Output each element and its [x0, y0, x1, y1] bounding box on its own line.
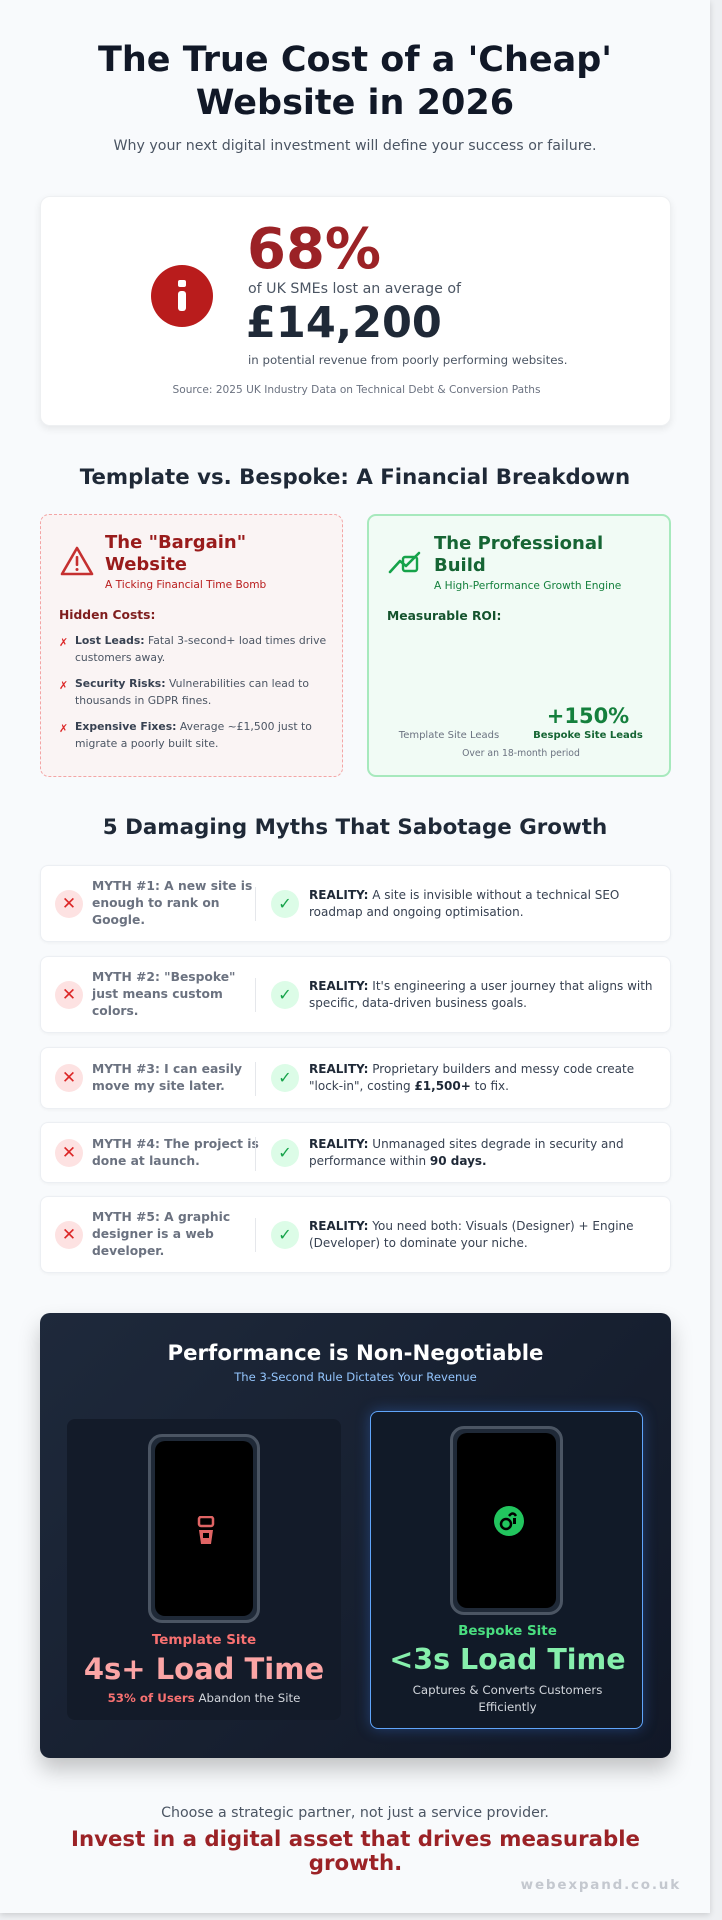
- section heading: template vs bespoke: Template vs. Bespoke: A Financial Breakdown: [80, 465, 630, 490]
- myth row 5: [40, 1196, 671, 1273]
- stat caption: in potential revenue from poorly performing websites.: [248, 353, 567, 367]
- chart: leads comparison: Template Site Leads: [399, 730, 499, 741]
- cost list: [59, 634, 326, 750]
- panel title: [434, 533, 603, 576]
- source: Source: 2025 UK Industry Data on Technical Debt & Conversion Paths: [172, 384, 540, 396]
- panel: professional build: [367, 514, 671, 777]
- myth row 2: REALITY: It's engineering a user journey that aligns with specific, data-driven business goals.: [309, 979, 653, 1010]
- stat text: of UK SMEs lost an average of: [248, 281, 461, 297]
- cost list: ✗: [59, 722, 68, 735]
- myth row 3: ✕: [62, 1068, 76, 1088]
- myth row 3: ✓: [278, 1068, 292, 1087]
- myth row 2: ✓: [278, 985, 292, 1004]
- myth row 2: ✕: [62, 985, 76, 1005]
- phone: template: [148, 1434, 260, 1623]
- myth row 4: ✓: [278, 1143, 292, 1162]
- subtitle: Why your next digital investment will define your success or failure.: [113, 138, 597, 154]
- cost list: Security Risks: Vulnerabilities can lead to thousands in GDPR fines.: [75, 677, 309, 707]
- panel subtitle: A Ticking Financial Time Bomb: [105, 579, 266, 591]
- panel: performance: [40, 1313, 671, 1758]
- brand: webexpand.co.uk: [521, 1877, 681, 1893]
- label: template site: Template Site: [152, 1632, 256, 1648]
- myth row 5: REALITY: You need both: Visuals (Designer) + Engine (Developer) to dominate your niche.: [309, 1219, 634, 1250]
- chart: leads comparison: Over an 18-month period: [462, 748, 580, 759]
- stat 68%: 68%: [247, 217, 381, 282]
- card: bespoke site: [370, 1411, 643, 1729]
- myth row 4: [40, 1122, 671, 1183]
- performance subtitle: The 3-Second Rule Dictates Your Revenue: [234, 1370, 477, 1384]
- footer call to action: Invest in a digital asset that drives measurable growth.: [71, 1827, 640, 1876]
- stat £14,200: £14,200: [246, 298, 442, 348]
- panel title: The "Bargain": [105, 532, 246, 553]
- icon: slow: [198, 1516, 214, 1544]
- myth row 1: MYTH #1: A new site is enough to rank on Google.: [92, 879, 252, 927]
- myth row 2: [40, 956, 671, 1033]
- myth row 1: ✓: [278, 894, 292, 913]
- performance heading: Performance is Non-Negotiable: [168, 1341, 544, 1366]
- phone: bespoke: [450, 1426, 563, 1615]
- cost list: ✗: [59, 679, 68, 692]
- panel title: Website: [105, 554, 187, 575]
- panel subtitle: A High-Performance Growth Engine: [434, 580, 621, 592]
- panel: bargain website: [40, 514, 343, 777]
- cost list: Lost Leads: Fatal 3-second+ load times drive customers away.: [75, 634, 326, 664]
- myth row 4: ✕: [62, 1143, 76, 1163]
- footer tagline: Choose a strategic partner, not just a service provider.: [161, 1805, 549, 1821]
- myth row 1: [40, 865, 671, 942]
- myth row 3: [40, 1047, 671, 1109]
- title: [98, 40, 612, 123]
- myth row 1: REALITY: A site is invisible without a technical SEO roadmap and ongoing optimisation.: [309, 888, 619, 919]
- section heading: myths: 5 Damaging Myths That Sabotage Growth: [103, 815, 607, 840]
- stat: 4s+ load time: 4s+ Load Time: [84, 1652, 324, 1686]
- label: bespoke site: Bespoke Site: [458, 1623, 557, 1639]
- title: The True Cost of a 'Cheap': [98, 40, 612, 80]
- icon: warning triangle: [60, 546, 94, 576]
- title: Website in 2026: [196, 83, 514, 123]
- chart: leads comparison: Bespoke Site Leads: [533, 730, 643, 741]
- myth row 5: ✕: [62, 1225, 76, 1245]
- caption: Captures & Converts Customers Efficiently: [413, 1683, 602, 1714]
- chart: leads comparison: +150%: [547, 704, 629, 728]
- myth row 5: ✓: [278, 1225, 292, 1244]
- icon: alert circle: [151, 265, 213, 327]
- cost list: Expensive Fixes: Average ~£1,500 just to migrate a poorly built site.: [75, 720, 312, 750]
- myth row 1: ✕: [62, 894, 76, 914]
- myth row 4: REALITY: Unmanaged sites degrade in security and performance within 90 days.: [309, 1137, 624, 1168]
- caption: 53% of Users Abandon the Site: [108, 1691, 300, 1705]
- card: template site: [67, 1419, 341, 1720]
- myth row 3: REALITY: Proprietary builders and messy code create "lock-in", costing £1,500+ to fix.: [309, 1062, 634, 1093]
- cost list: ✗: [59, 636, 68, 649]
- icon: growth chart: [388, 552, 420, 574]
- icon: fast: [494, 1506, 524, 1536]
- myth row 4: MYTH #4: The project is done at launch.: [92, 1137, 259, 1168]
- hidden costs heading: Hidden Costs:: [59, 608, 155, 622]
- chart: leads comparison: [398, 704, 643, 759]
- myth row 2: MYTH #2: "Bespoke" just means custom colors.: [92, 970, 235, 1018]
- panel title: Build: [434, 555, 486, 576]
- panel title: The Professional: [434, 533, 603, 554]
- stat: <3s load time: <3s Load Time: [389, 1643, 626, 1676]
- stat card: [40, 196, 671, 426]
- ROI heading: Measurable ROI:: [387, 609, 501, 623]
- myth row 5: MYTH #5: A graphic designer is a web developer.: [92, 1210, 230, 1258]
- panel title: [105, 532, 246, 575]
- myth row 3: MYTH #3: I can easily move my site later.: [92, 1062, 242, 1093]
